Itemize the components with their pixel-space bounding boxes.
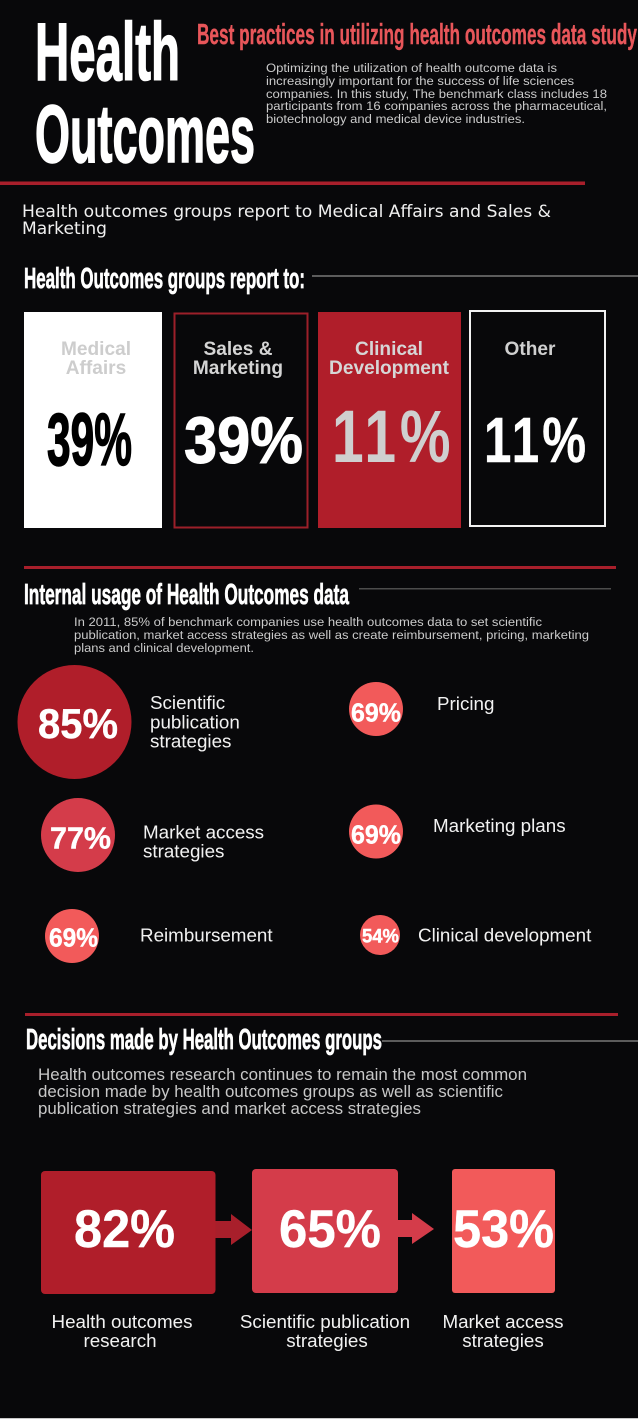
stat: marketing plans: Marketing plans	[433, 815, 566, 836]
panel: other	[470, 311, 605, 526]
stat: pricing: 69%	[351, 698, 401, 728]
panel: medical affairs: Affairs	[66, 358, 126, 379]
stat: scientific publication strategies: Scientific	[150, 692, 225, 713]
stat: reimbursement: 69%	[49, 922, 98, 952]
internal usage paragraph: plans and clinical development.	[74, 641, 254, 655]
decisions paragraph: Health outcomes research continues to remain the most common	[38, 1066, 527, 1084]
box: health outcomes research	[41, 1171, 216, 1351]
decisions paragraph: publication strategies and market access strategies	[38, 1100, 421, 1118]
decisions paragraph: decision made by health outcomes groups as well as scientific	[38, 1083, 503, 1101]
panel: sales and marketing: 39%	[184, 403, 303, 477]
panel: clinical development: 11%	[332, 395, 454, 478]
intro paragraph	[266, 61, 607, 126]
intro paragraph: participants from 16 companies across the pharmaceutical,	[266, 99, 607, 113]
title: Outcomes	[35, 89, 255, 180]
section summary	[22, 202, 551, 238]
stat: scientific publication strategies: 85%	[38, 700, 118, 747]
stat: pricing: Pricing	[437, 693, 494, 714]
panel: other: 11%	[484, 405, 589, 477]
stat: scientific publication strategies	[18, 665, 240, 779]
stat: scientific publication strategies: strategies	[150, 730, 231, 752]
box: market access strategies: Market access	[442, 1311, 564, 1332]
intro paragraph: biotechnology and medical device industries.	[266, 112, 525, 126]
section summary: Marketing	[22, 219, 107, 238]
panel: sales and marketing	[174, 314, 308, 528]
box: market access strategies: 53%	[453, 1200, 554, 1259]
internal usage paragraph: publication, market access strategies as well as create reimbursement, pricing, marketing	[74, 628, 589, 642]
stat: marketing plans	[349, 804, 566, 858]
box: scientific publication strategies: Scientific publication	[240, 1311, 410, 1332]
intro paragraph: Optimizing the utilization of health outcome data is	[266, 61, 557, 75]
section summary: Health outcomes groups report to Medical Affairs and Sales &	[22, 202, 551, 221]
stat: market access strategies: Market access	[143, 822, 264, 842]
stat: market access strategies: 77%	[50, 820, 111, 856]
intro paragraph: companies. In this study, The benchmark class includes 18	[266, 87, 607, 101]
panel: medical affairs: 39%	[47, 398, 132, 481]
arrow: publication to access	[398, 1213, 434, 1244]
stat: reimbursement	[45, 909, 273, 963]
panel: medical affairs: Medical	[61, 339, 131, 360]
panel: clinical development: Clinical	[355, 339, 423, 360]
panel: clinical development	[318, 312, 461, 528]
stat: scientific publication strategies: publication	[150, 712, 240, 732]
stat: clinical development: Clinical development	[418, 924, 592, 946]
stat: clinical development: 54%	[362, 926, 399, 948]
title: Health	[35, 7, 180, 98]
box: scientific publication strategies: strategies	[286, 1330, 368, 1351]
title	[35, 7, 255, 180]
box: health outcomes research: research	[83, 1330, 157, 1351]
arrow: research to publication	[215, 1214, 252, 1245]
stat: pricing	[349, 682, 494, 736]
internal usage paragraph	[74, 615, 589, 655]
stat: marketing plans: 69%	[351, 820, 401, 850]
box: scientific publication strategies	[240, 1169, 410, 1351]
panel: medical affairs	[24, 312, 162, 528]
box: market access strategies: strategies	[462, 1330, 544, 1351]
box: scientific publication strategies: 65%	[279, 1200, 381, 1259]
stat: clinical development	[360, 915, 592, 955]
heading: internal usage: Internal usage of Health Outcomes data	[24, 579, 350, 611]
stat: market access strategies	[41, 798, 264, 872]
heading: decisions: Decisions made by Health Outcomes groups	[26, 1024, 382, 1056]
box: health outcomes research: Health outcomes	[52, 1311, 192, 1332]
box: health outcomes research: 82%	[74, 1200, 175, 1259]
internal usage paragraph: In 2011, 85% of benchmark companies use health outcomes data to set scientific	[74, 615, 542, 629]
box: market access strategies	[442, 1169, 564, 1351]
panel: other: Other	[505, 339, 556, 360]
panel: sales and marketing: Sales &	[204, 339, 273, 360]
panel: sales and marketing: Marketing	[193, 358, 283, 379]
heading: report to: Health Outcomes groups report to:	[24, 263, 305, 295]
stat: reimbursement: Reimbursement	[140, 924, 273, 946]
intro paragraph: increasingly important for the success of life sciences	[266, 74, 574, 88]
panel: clinical development: Development	[329, 358, 450, 379]
stat: market access strategies: strategies	[143, 840, 224, 862]
decisions paragraph	[38, 1066, 527, 1118]
